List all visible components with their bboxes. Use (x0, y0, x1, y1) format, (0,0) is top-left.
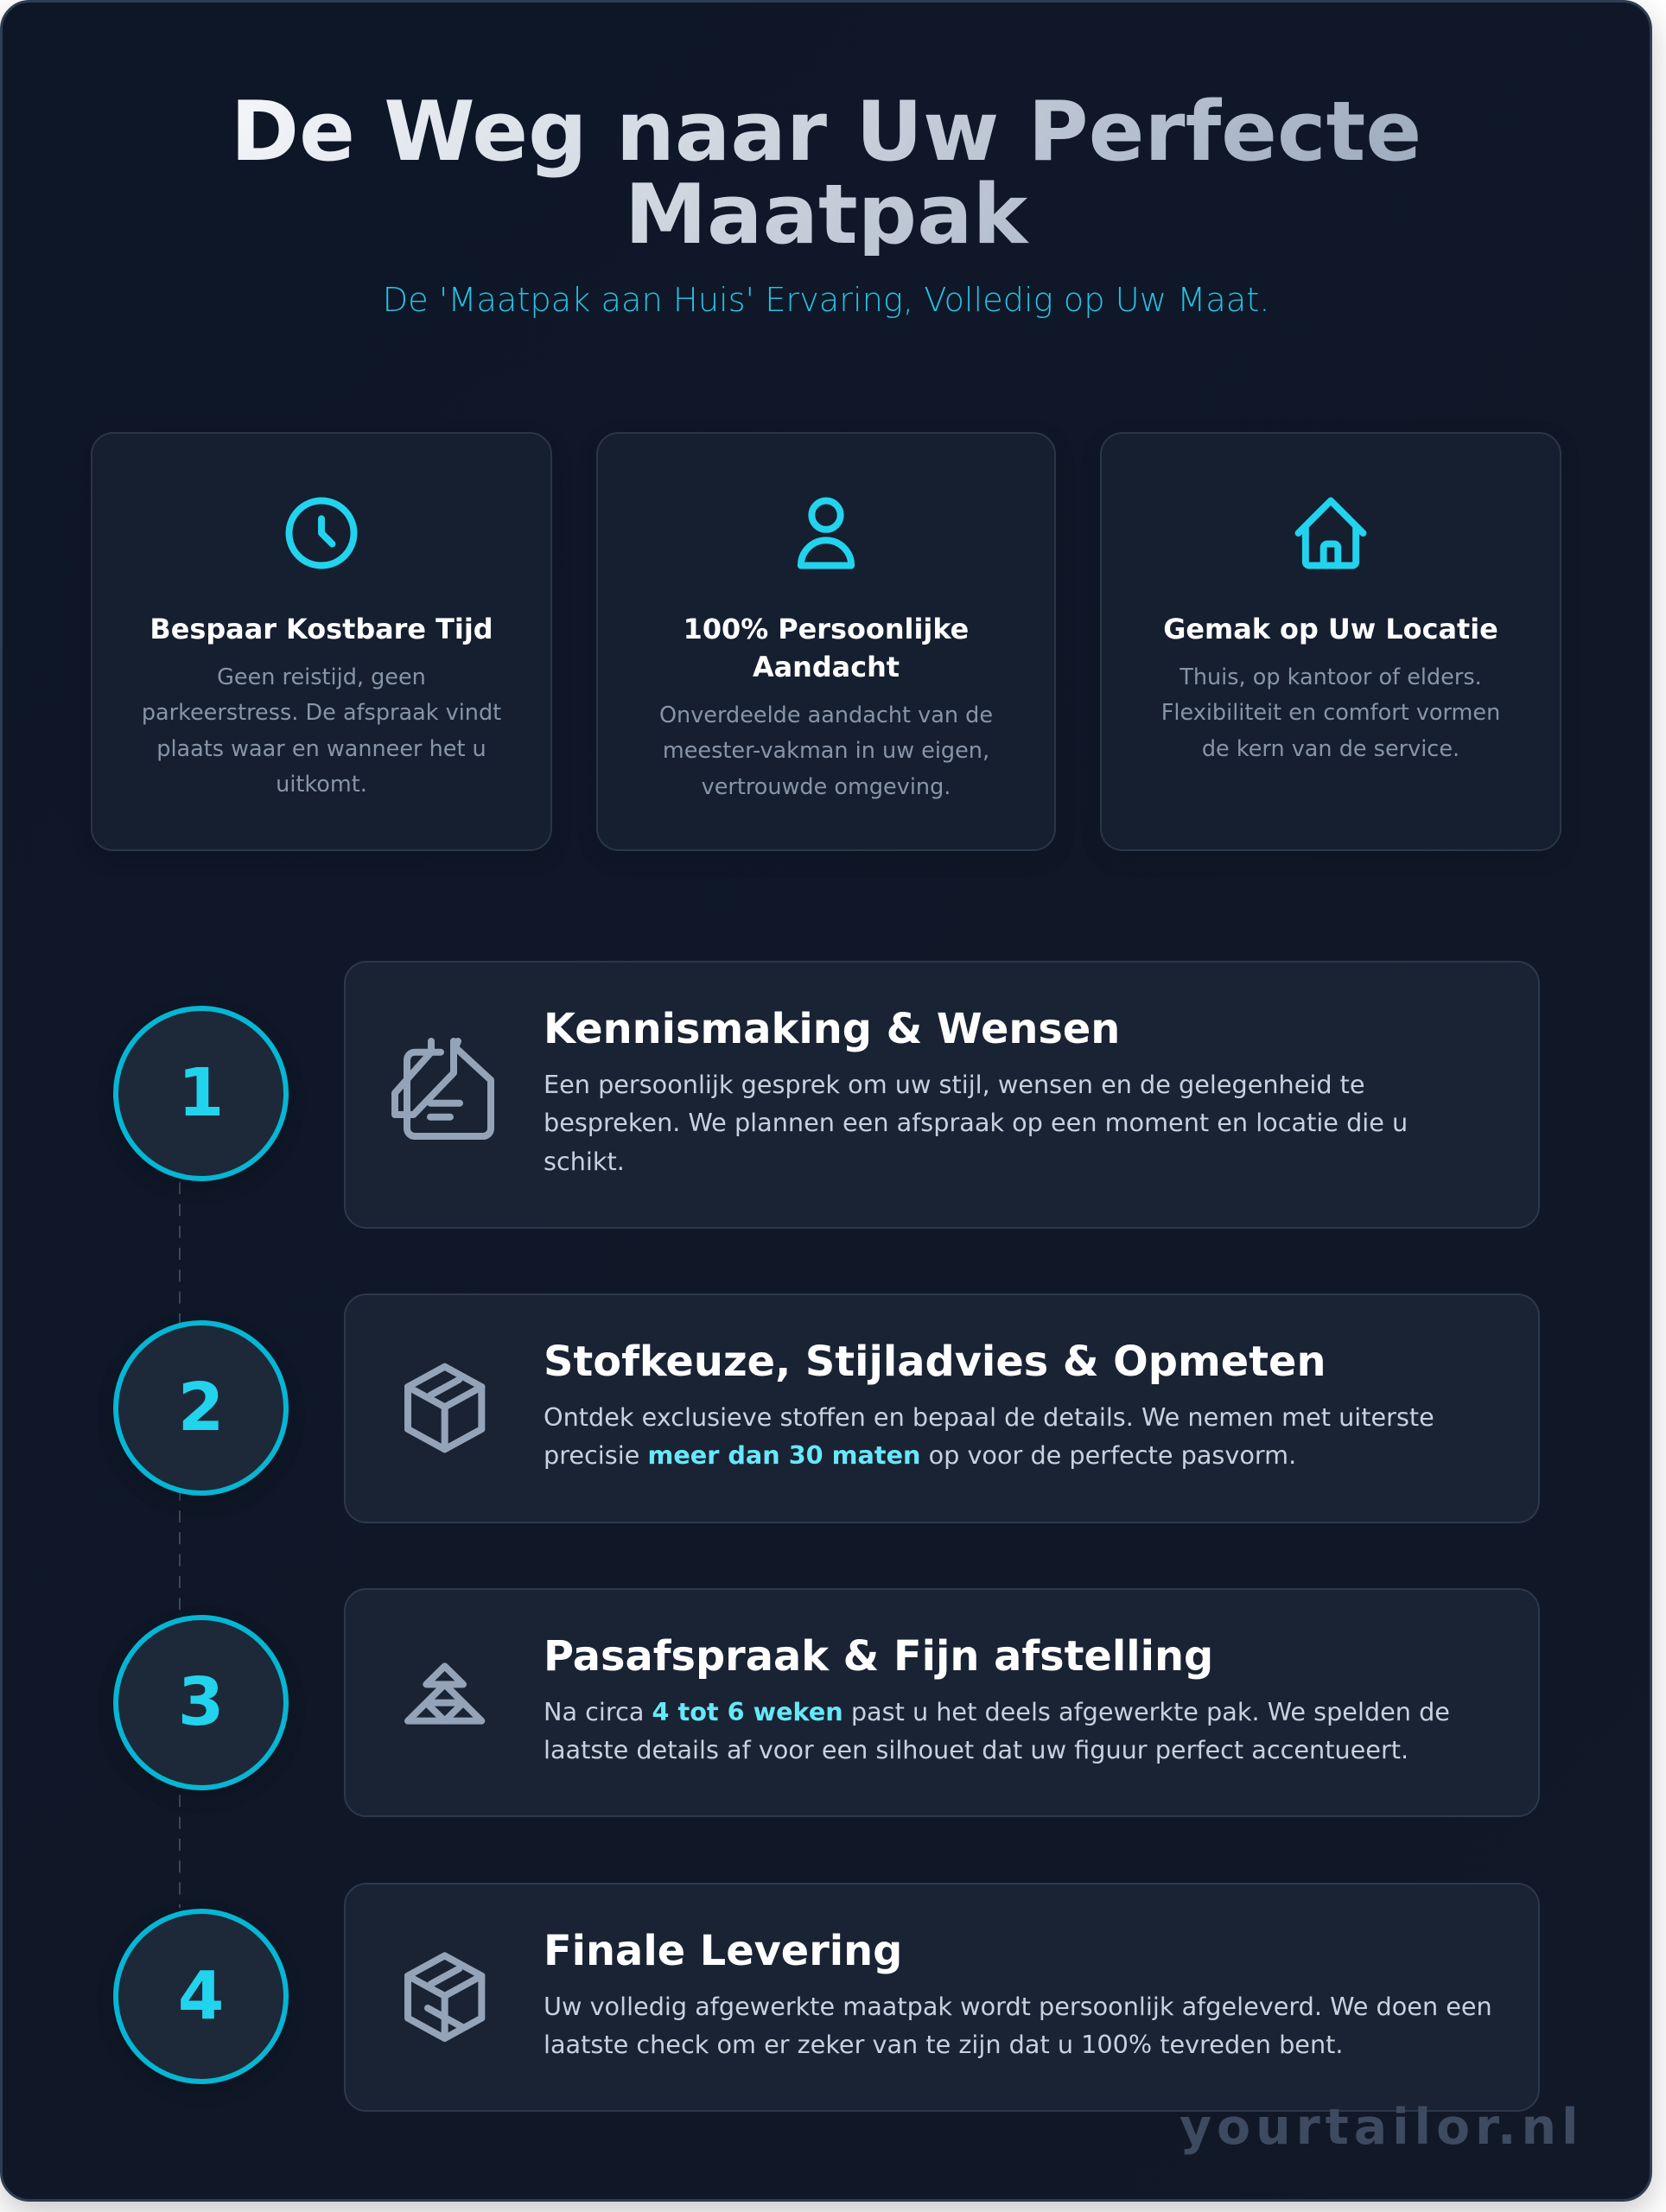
title (173, 90, 1479, 256)
step 1 text: Een persoonlijk gesprek om uw stijl, wensen en de gelegenheid te (544, 1070, 1365, 1099)
icon: delivery box (404, 1952, 486, 2042)
step number 3 (113, 1615, 289, 1790)
step number 1 (113, 1006, 289, 1181)
icon: person (797, 498, 855, 569)
text: attention: vertrouwde omgeving. (702, 774, 951, 800)
text: attention (659, 702, 993, 800)
step 3 heading: Pasafspraak & Fijn afstelling (544, 1633, 1213, 1681)
text: location: Thuis, op kantoor of elders. (1180, 664, 1482, 690)
heading: attention (684, 613, 969, 683)
text: location: de kern van de service. (1202, 736, 1459, 762)
icon: box (404, 1363, 486, 1453)
icon: house with pencil (391, 1038, 494, 1140)
text: location (1161, 664, 1500, 762)
step card 3 (344, 1588, 1540, 1816)
text: time (142, 664, 501, 798)
step 4 heading: Finale Levering (544, 1928, 902, 1975)
text: time: parkeerstress. De afspraak vindt (142, 700, 501, 726)
step 2 text (544, 1402, 1434, 1470)
step 1 text: bespreken. We plannen een afspraak op een moment en locatie die u (544, 1108, 1408, 1137)
heading: attention: 100% Persoonlijke (684, 613, 969, 645)
text: location: Flexibiliteit en comfort vormen (1161, 700, 1500, 726)
step 4 text: laatste check om er zeker van te zijn dat u 100% tevreden bent. (544, 2030, 1344, 2059)
step card 4 (344, 1883, 1540, 2112)
step number 2 (113, 1320, 289, 1496)
heading: time: Bespaar Kostbare Tijd (149, 613, 493, 645)
step 2 text: Ontdek exclusieve stoffen en bepaal de details. We nemen met uiterste (544, 1402, 1434, 1432)
panel: benefit attention (596, 432, 1056, 850)
icon: clock (285, 498, 358, 569)
text: time: Geen reistijd, geen (217, 664, 426, 690)
step 1 heading: Kennismaking & Wensen (544, 1006, 1120, 1053)
panel: benefit location (1100, 432, 1561, 850)
step 3 text: laatste details af voor een silhouet dat uw figuur perfect accentueert. (544, 1735, 1408, 1764)
step card 1 (344, 961, 1540, 1229)
step number 2: 2 (178, 1370, 224, 1446)
step card 2 (344, 1294, 1540, 1522)
subtitle: De 'Maatpak aan Huis' Ervaring, Volledig op Uw Maat. (383, 281, 1269, 320)
text: attention: Onverdeelde aandacht van de (659, 702, 993, 728)
step number 4 (113, 1909, 289, 2084)
step 1 text (544, 1070, 1408, 1176)
step number 3: 3 (178, 1664, 224, 1741)
heading: attention: Aandacht (753, 651, 900, 683)
step 3 text: Na circa 4 tot 6 weken past u het deels afgewerkte pak. We spelden de (544, 1697, 1450, 1726)
step 4 text (544, 1992, 1492, 2059)
step 2 heading: Stofkeuze, Stijladvies & Opmeten (544, 1338, 1326, 1386)
icon: house (1294, 498, 1367, 569)
step 2 text: precisie meer dan 30 maten op voor de perfecte pasvorm. (544, 1440, 1296, 1470)
text: attention: meester-vakman in uw eigen, (663, 738, 989, 764)
panel: benefit time (91, 432, 552, 850)
watermark: yourtailor.nl (1180, 2099, 1583, 2156)
step 1 text: schikt. (544, 1147, 625, 1176)
text: time: plaats waar en wanneer het u (156, 736, 486, 762)
icon: triangle fitting (404, 1662, 486, 1725)
step 4 text: Uw volledig afgewerkte maatpak wordt persoonlijk afgeleverd. We doen een (544, 1992, 1492, 2021)
heading: location: Gemak op Uw Locatie (1163, 613, 1498, 645)
text: time: uitkomt. (276, 772, 367, 798)
title: De Weg naar Uw Perfecte (231, 83, 1421, 180)
step number 1: 1 (178, 1055, 224, 1132)
title: Maatpak (625, 166, 1027, 263)
step 3 text (544, 1697, 1450, 1764)
timeline dashed connector (179, 1182, 181, 1908)
step number 4: 4 (178, 1958, 224, 2035)
